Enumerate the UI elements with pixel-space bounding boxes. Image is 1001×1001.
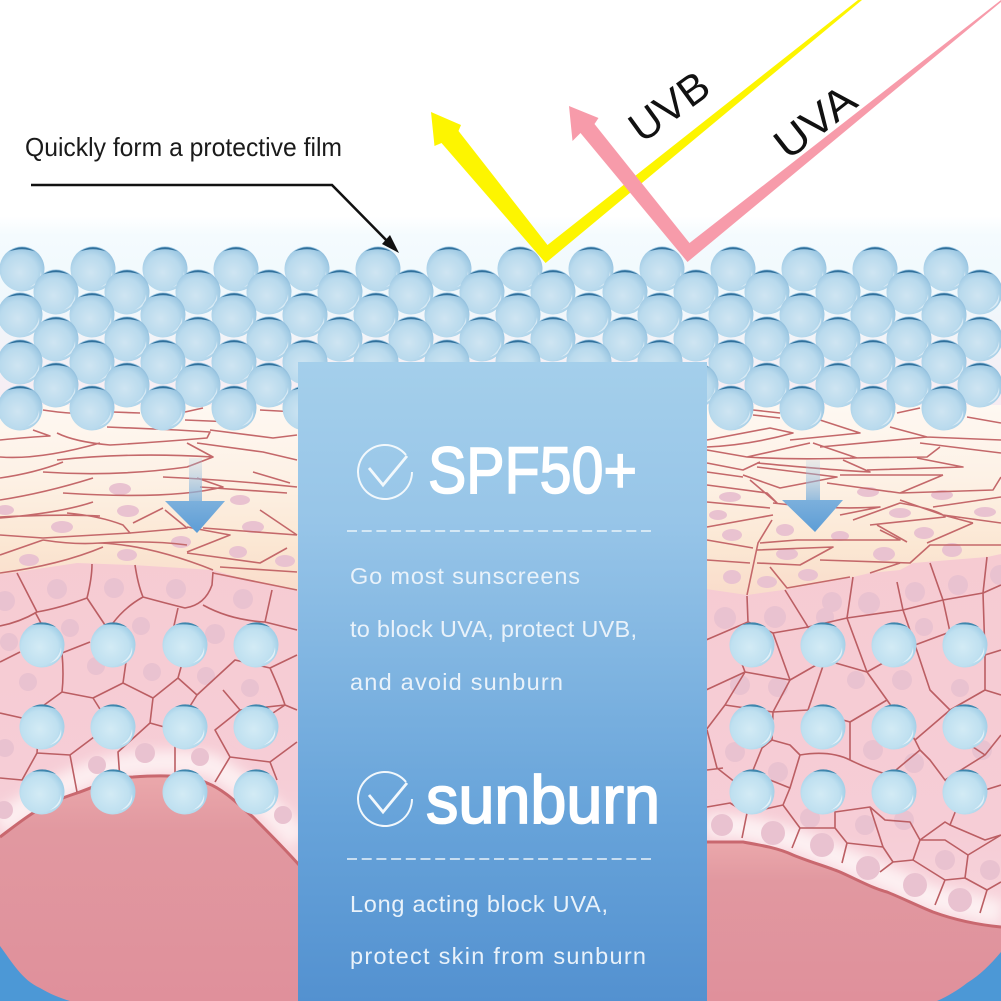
callout arrow to film xyxy=(31,185,399,253)
dermis border right xyxy=(700,842,1001,927)
text block: sunburn description xyxy=(350,891,646,969)
spiny cell walls left xyxy=(0,564,297,792)
label: UVA: UVA xyxy=(765,75,865,168)
background sky and film glow xyxy=(0,0,1001,420)
epidermis cell walls left xyxy=(0,408,297,590)
pale cells above the dermis right xyxy=(706,825,1001,913)
icon: check in circle SPF xyxy=(358,445,412,499)
text block: SPF description: to block UVA, protect UVB, xyxy=(350,616,637,642)
cream epidermis layer right xyxy=(700,405,1001,595)
panel background xyxy=(298,362,707,1001)
callout: protective film label: Quickly form a protective film xyxy=(25,132,342,162)
dermis border left xyxy=(0,776,300,866)
icon: blue down arrow right xyxy=(782,460,843,532)
divider: SPF xyxy=(347,530,655,532)
divider: sunburn xyxy=(347,858,655,860)
spiny cell walls right xyxy=(706,557,1001,913)
text block: sunburn description: Long acting block UVA, xyxy=(350,891,608,917)
cream epidermis layer left xyxy=(0,405,300,591)
arrow: UVA reflected ray xyxy=(569,0,1001,262)
text block: SPF description: and avoid sunburn xyxy=(350,669,563,695)
epidermis cell walls right xyxy=(707,408,1001,595)
text block: SPF description xyxy=(350,563,637,695)
dermis left xyxy=(0,776,300,1001)
spiny pink cell layer right xyxy=(700,540,1001,960)
panel: skin cross-section right xyxy=(700,405,1001,1001)
arrow: UVB reflected ray xyxy=(431,0,862,263)
bottom corner blue left xyxy=(0,946,70,1001)
spiny pink cell layer left xyxy=(0,540,300,880)
heading: sunburn: sunburn xyxy=(426,762,660,838)
cell nuclei right xyxy=(709,487,1001,912)
bottom corner blue right xyxy=(937,952,1001,1001)
panel: skin cross-section left xyxy=(0,405,300,1001)
label: UVB: UVB xyxy=(620,62,718,151)
pale cells above the dermis left xyxy=(0,762,298,840)
absorbed bubbles left xyxy=(20,622,278,814)
cell nuclei left xyxy=(0,483,295,824)
text block: sunburn description: protect skin from sunburn xyxy=(350,943,646,969)
heading: SPF50+: SPF50+ xyxy=(428,433,637,507)
panel: SPF information xyxy=(298,362,707,1001)
absorbed bubbles right xyxy=(730,622,988,814)
protective film of sunscreen bubbles xyxy=(0,246,1001,430)
icon: check in circle sunburn xyxy=(358,772,412,826)
icon: blue down arrow left xyxy=(165,458,225,533)
text block: SPF description: Go most sunscreens xyxy=(350,563,580,589)
dermis right xyxy=(700,842,1001,1001)
